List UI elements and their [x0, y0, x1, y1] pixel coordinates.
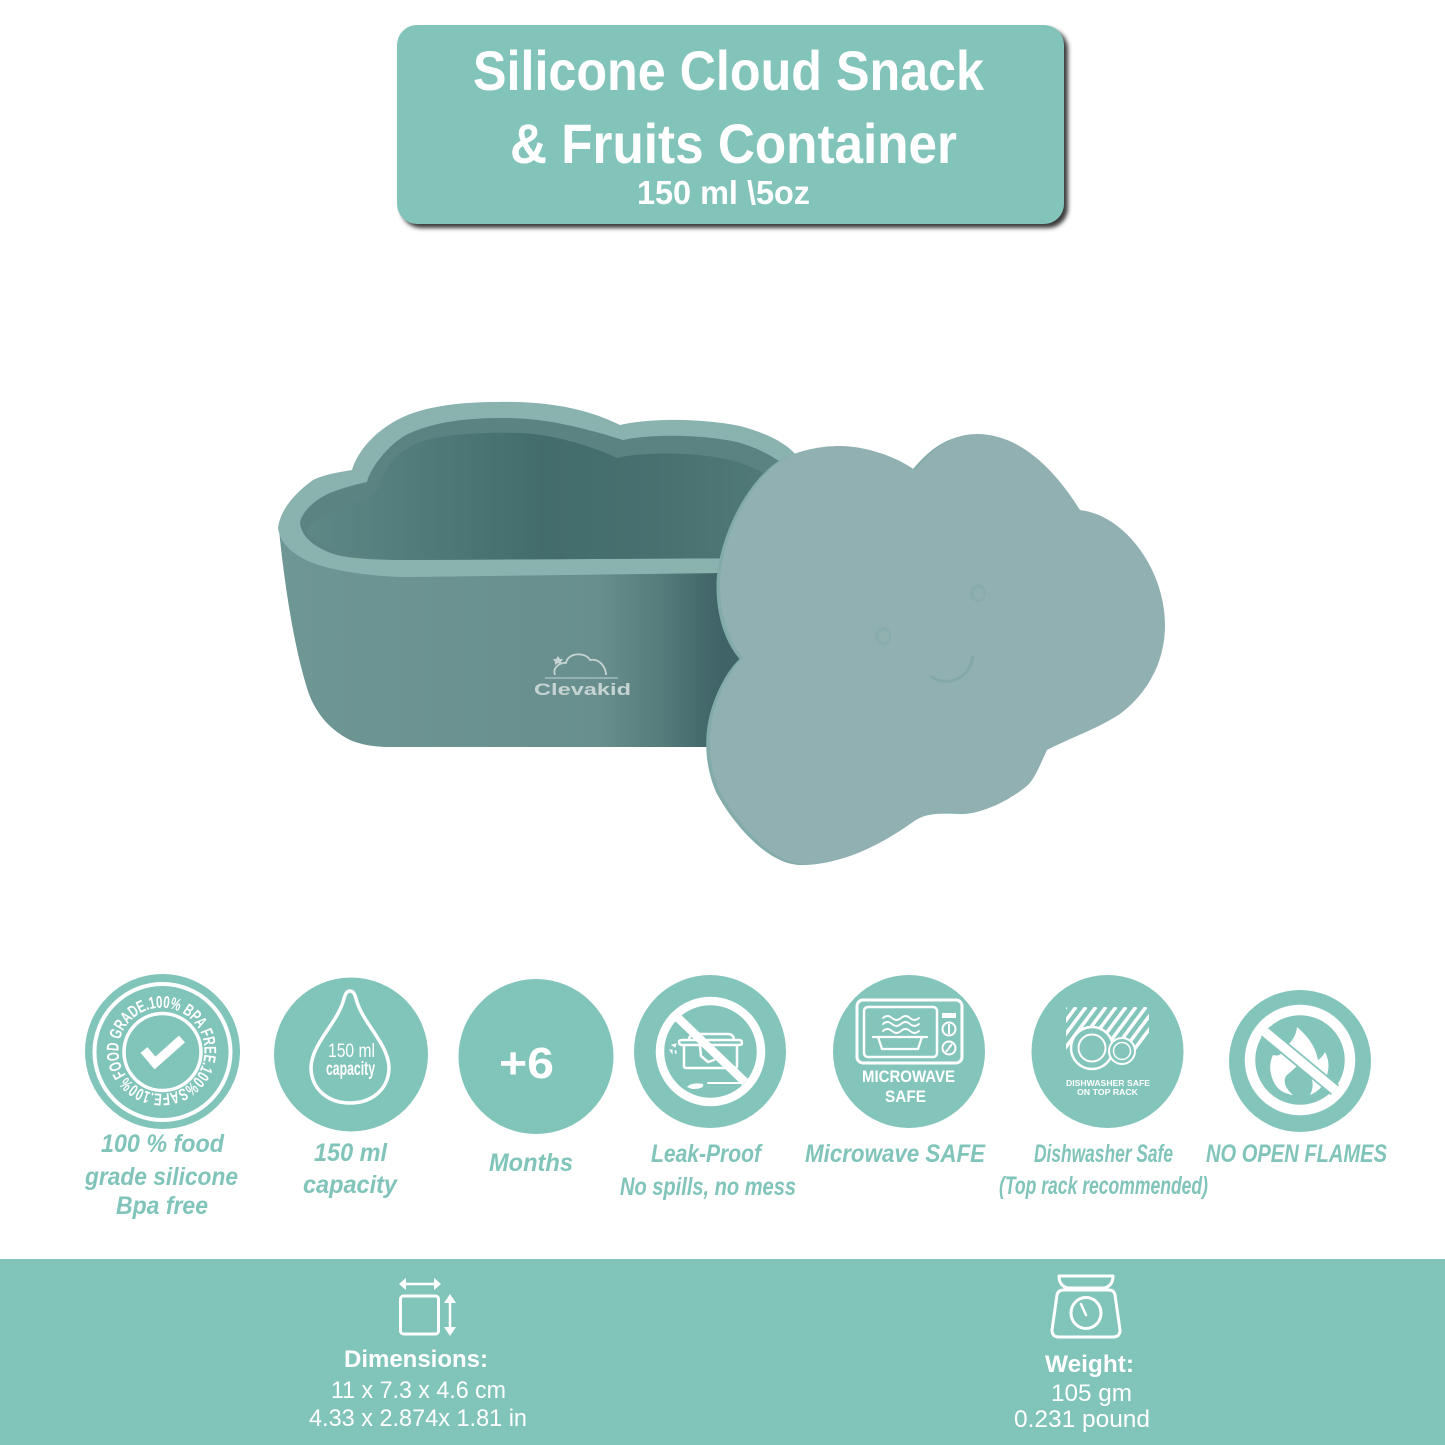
label: no open flames: NO OPEN FLAMES: [1206, 1140, 1387, 1168]
icon: dishes and rack: [1066, 1007, 1149, 1070]
badge: dishwasher safe: DISHWASHER SAFE: [1066, 1079, 1151, 1088]
icon: spilling container: [670, 1034, 742, 1089]
container interior wall: [307, 433, 790, 560]
badge: age +6: [458, 979, 614, 1134]
container rim: [278, 402, 800, 577]
label: capacity: [303, 1139, 398, 1199]
badge: microwave safe: SAFE: [885, 1087, 926, 1106]
footer band: [0, 1259, 1445, 1445]
capacity subtitle: 150 ml \5oz: [637, 174, 810, 211]
container body: [279, 530, 760, 747]
lid face: [875, 584, 986, 681]
label: food grade: Bpa free: [116, 1192, 208, 1220]
icon: kitchen scale: [1052, 1276, 1120, 1337]
product: cloud container with lid: [278, 402, 1165, 865]
title panel: [397, 25, 1068, 228]
badge: food grade: [85, 974, 240, 1129]
circular seal text: FOOD GRADE.100% BPA FREE.100%SAFE.100%: [106, 996, 216, 1106]
label: food grade: 100 % food: [101, 1130, 225, 1158]
badge: microwave safe: [833, 975, 985, 1128]
slash: [675, 1015, 745, 1082]
label: dishwasher safe: (Top rack recommended): [999, 1172, 1208, 1200]
lid: [710, 434, 1165, 864]
label: dishwasher safe: Dishwasher Safe: [1034, 1140, 1173, 1168]
weight text: 105 gm: [1051, 1380, 1132, 1407]
label: leak-proof: No spills, no mess: [620, 1173, 796, 1201]
badge: dishwasher safe: [1032, 975, 1184, 1128]
badge: leak-proof: [634, 975, 786, 1128]
weight text: 0.231 pound: [1014, 1406, 1150, 1433]
badge: dishwasher safe: ON TOP RACK: [1077, 1088, 1138, 1097]
badge: capacity drop: 150 ml: [328, 1041, 375, 1062]
label: capacity: capacity: [303, 1171, 398, 1199]
heading line 1: Silicone Cloud Snack: [473, 39, 985, 102]
label: months: Months: [489, 1149, 573, 1177]
dimensions text: Dimensions:: [344, 1346, 488, 1373]
heading line 2: & Fruits Container: [510, 112, 957, 175]
slash: [1265, 1032, 1335, 1090]
icon: microwave: [857, 1000, 962, 1063]
label: leak-proof: Leak-Proof: [651, 1140, 763, 1168]
logo: Clevakid: Clevakid: [534, 680, 631, 699]
badge: capacity drop: capacity: [326, 1059, 375, 1080]
badge: capacity drop: [274, 978, 428, 1132]
badge: microwave safe: MICROWAVE: [862, 1067, 955, 1086]
weight text: [1014, 1351, 1150, 1433]
badge: no open flames: [1229, 990, 1371, 1132]
logo: Clevakid: [534, 654, 631, 699]
dimensions text: 4.33 x 2.874x 1.81 in: [309, 1405, 527, 1432]
icon: dimensions: [399, 1278, 456, 1336]
icon: flame: [1270, 1027, 1328, 1095]
label: food grade: [84, 1130, 238, 1220]
dimensions text: [309, 1346, 527, 1432]
badge: age +6: +6: [499, 1039, 554, 1088]
rim opening: [300, 418, 790, 560]
icon: check mark: [144, 1039, 182, 1063]
label: microwave safe: Microwave SAFE: [805, 1140, 986, 1168]
weight text: Weight:: [1045, 1351, 1134, 1378]
icon: water drop: [311, 991, 389, 1103]
label: dishwasher safe: [999, 1140, 1208, 1200]
label: food grade: grade silicone: [84, 1163, 238, 1191]
label: capacity: 150 ml: [314, 1139, 388, 1167]
lid edge: [706, 435, 1162, 865]
dimensions text: 11 x 7.3 x 4.6 cm: [331, 1377, 506, 1404]
label: leak-proof: [620, 1140, 796, 1201]
